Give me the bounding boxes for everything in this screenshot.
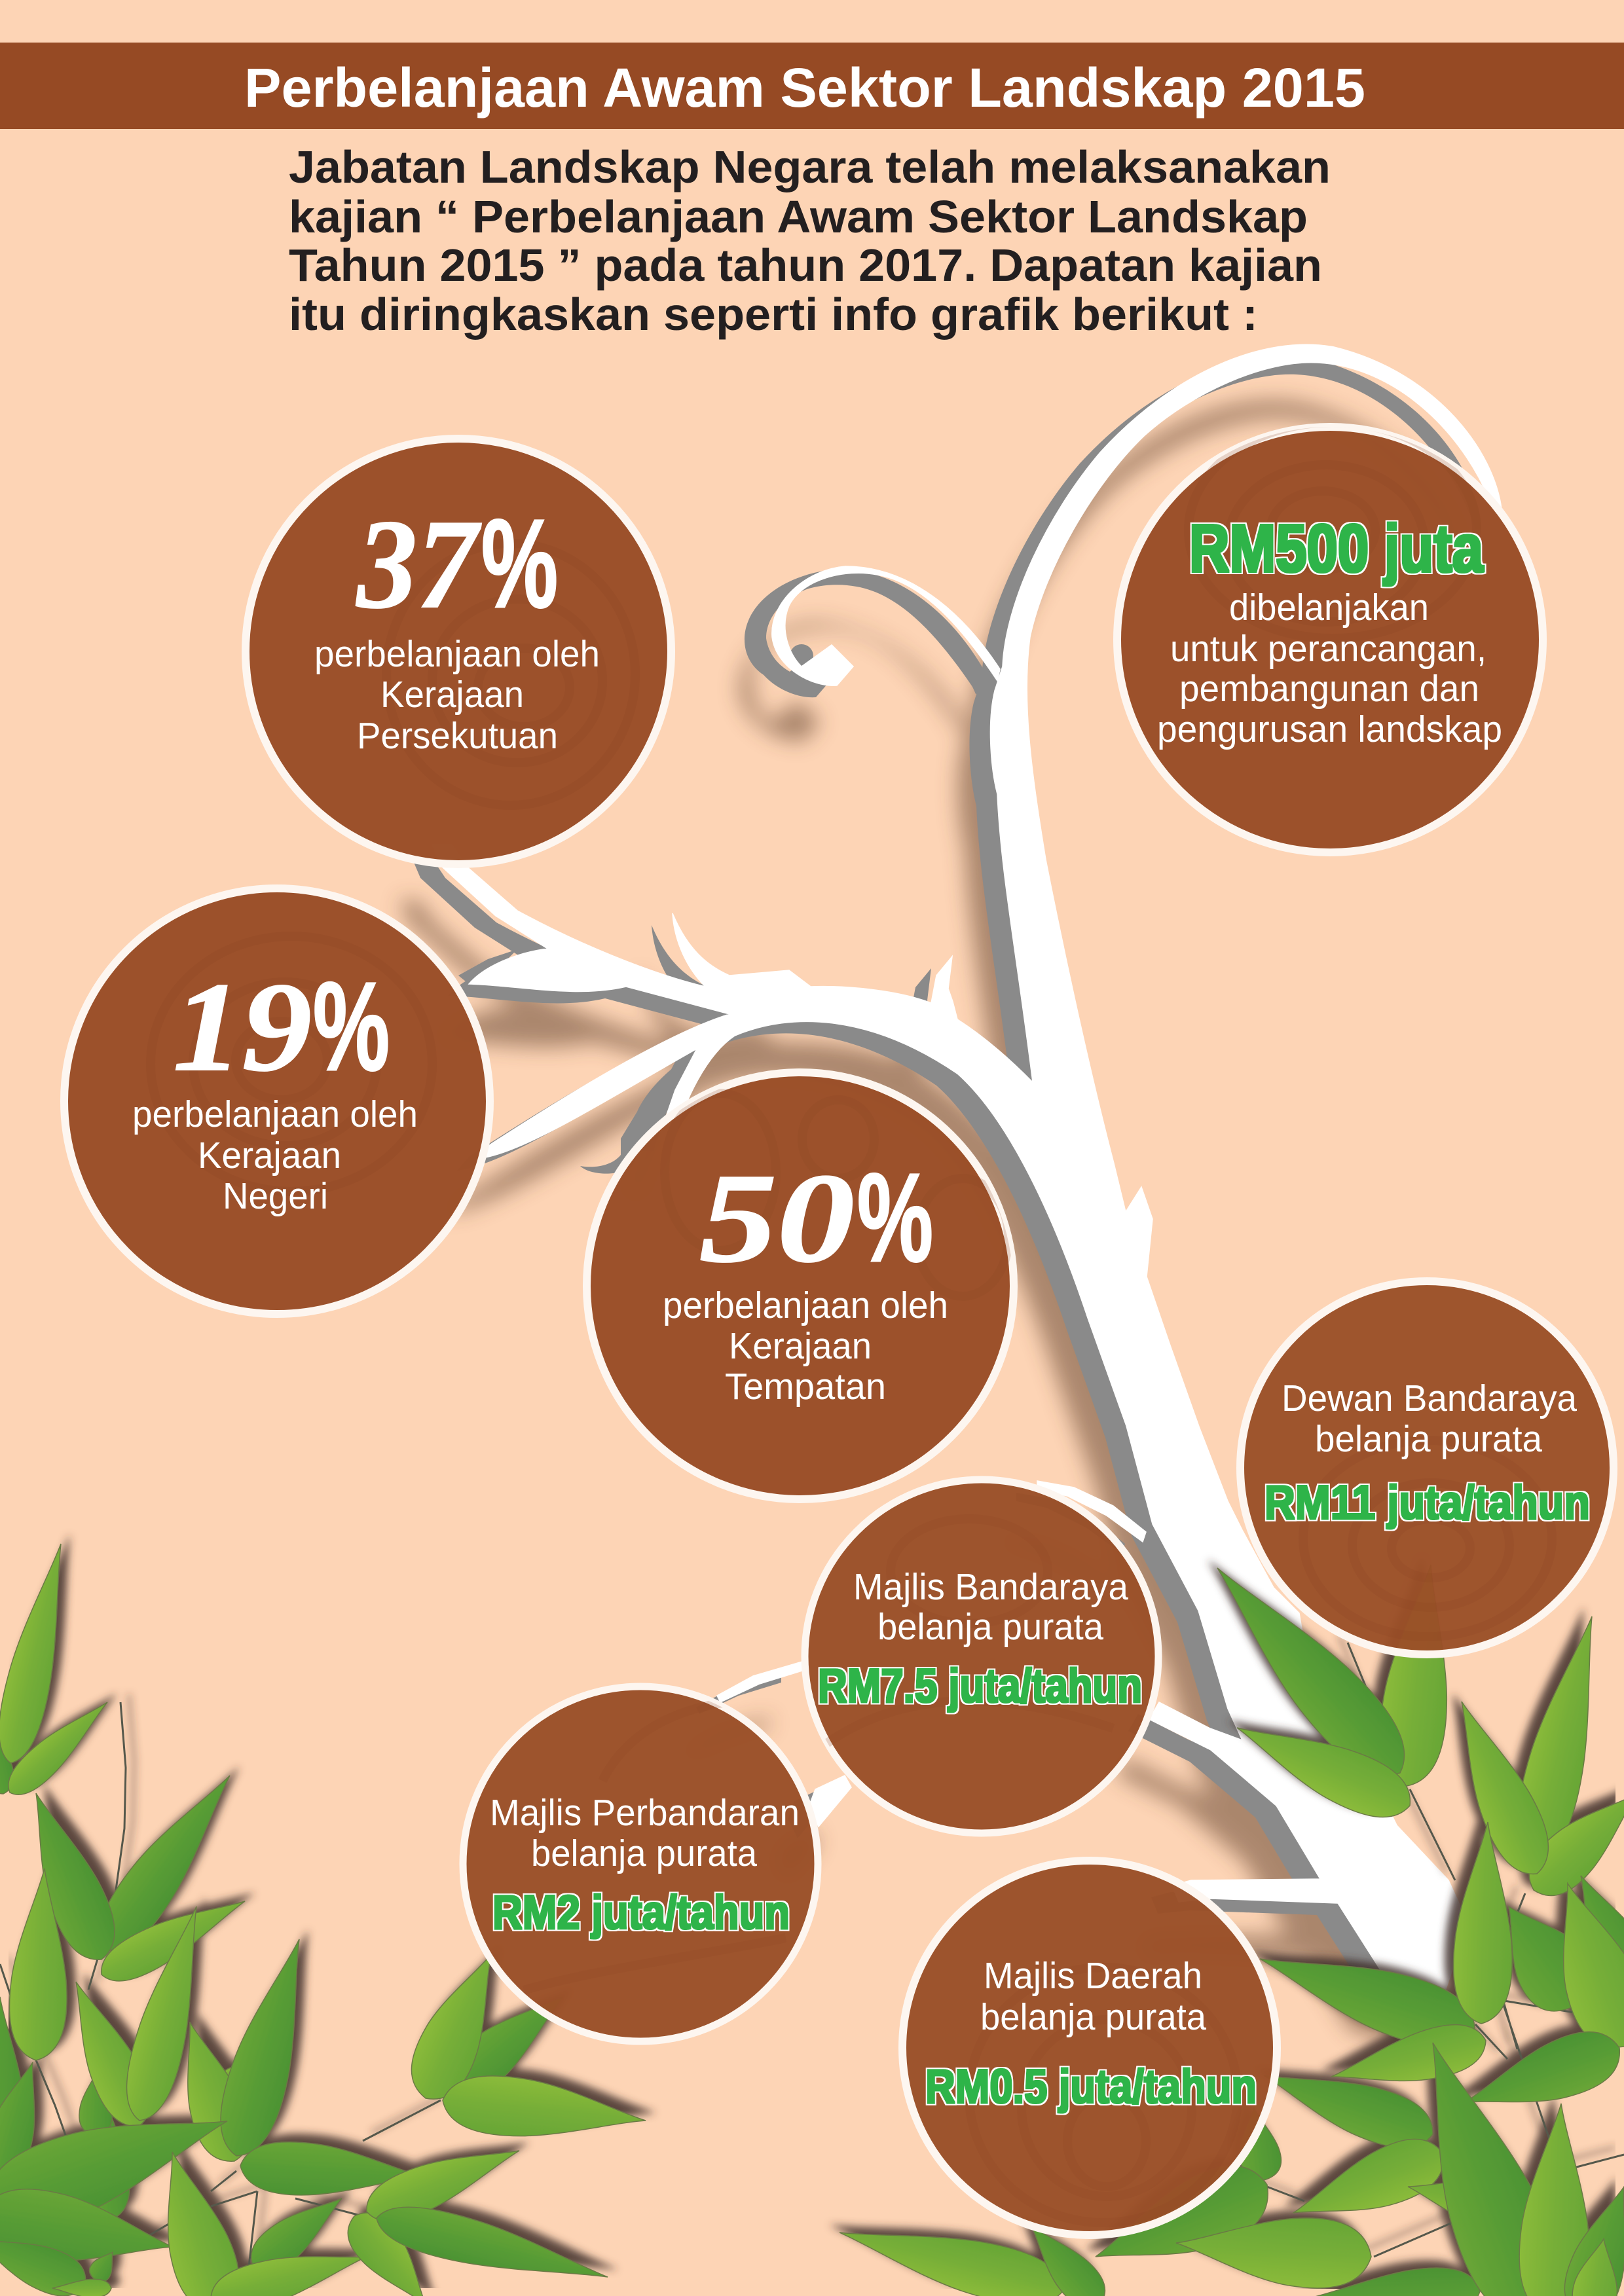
label: Majlis Daerah xyxy=(984,1955,1202,1997)
description: untuk perancangan, xyxy=(1170,628,1486,670)
percentage 37: % xyxy=(481,493,558,634)
circle: Majlis Bandaraya xyxy=(805,1480,1158,1833)
percentage 50 xyxy=(699,1147,933,1289)
title banner xyxy=(0,43,1624,129)
label federal: perbelanjaan oleh xyxy=(314,633,600,675)
circle: Dewan Bandaraya xyxy=(1240,1281,1614,1654)
label: Majlis Perbandaran xyxy=(490,1792,800,1834)
tree grey side xyxy=(411,356,1481,2003)
label federal: Persekutuan xyxy=(357,715,558,757)
label xyxy=(853,1566,1128,1648)
amount RM500 juta: RM500 juta xyxy=(1189,511,1484,586)
amount RM0.5: RM0.5 juta/tahun xyxy=(925,2060,1257,2113)
label federal xyxy=(314,633,600,757)
description: dibelanjakan xyxy=(1229,587,1429,629)
tree soft shadow xyxy=(399,400,1469,2047)
percentage 19 xyxy=(173,956,390,1098)
stems right xyxy=(1262,1643,1624,2257)
percentage 19: % xyxy=(313,956,390,1097)
percentage 50: % xyxy=(857,1147,933,1288)
label state: Kerajaan xyxy=(198,1135,341,1176)
label state: perbelanjaan oleh xyxy=(132,1093,418,1135)
label federal: Kerajaan xyxy=(380,674,524,716)
bamboo leaves left xyxy=(0,1539,649,2296)
label state xyxy=(132,1093,418,1217)
description xyxy=(1157,587,1502,750)
amount RM7.5: RM7.5 juta/tahun xyxy=(818,1660,1142,1713)
label xyxy=(980,1955,1206,2038)
percentage 19: 19 xyxy=(173,957,312,1098)
stems left xyxy=(0,1702,441,2267)
description: pembangunan dan xyxy=(1179,668,1479,710)
amount RM2: RM2 juta/tahun xyxy=(492,1886,790,1939)
label local: Tempatan xyxy=(725,1366,886,1408)
label xyxy=(1282,1377,1577,1460)
label: belanja purata xyxy=(877,1606,1103,1648)
circle: Majlis Perbandaran xyxy=(463,1686,818,2041)
bamboo leaves right xyxy=(833,1546,1624,2296)
label local xyxy=(663,1285,948,1408)
intro text block: itu diringkaskan seperti info grafik berikut : xyxy=(289,289,1258,340)
percentage 50: 50 xyxy=(699,1148,855,1289)
circle: 37 percent federal xyxy=(246,439,671,864)
intro text block: kajian “ Perbelanjaan Awam Sektor Landskap xyxy=(289,191,1308,242)
intro text block xyxy=(289,141,1331,340)
intro text block: Tahun 2015 ” pada tahun 2017. Dapatan kajian xyxy=(289,240,1322,291)
circle: 19 percent state xyxy=(64,888,490,1314)
label state: Negeri xyxy=(223,1175,328,1217)
title text: Perbelanjaan Awam Sektor Landskap 2015 xyxy=(244,57,1365,118)
circle: 50 percent local xyxy=(587,1072,1014,1499)
circle: Majlis Daerah xyxy=(902,1861,1277,2235)
label local: perbelanjaan oleh xyxy=(663,1285,948,1326)
label: belanja purata xyxy=(1315,1418,1542,1460)
amount RM11: RM11 juta/tahun xyxy=(1264,1476,1590,1529)
percentage 37: 37 xyxy=(356,494,481,635)
description: pengurusan landskap xyxy=(1157,708,1502,750)
tree white xyxy=(432,344,1502,1991)
label: Majlis Bandaraya xyxy=(853,1566,1128,1608)
percentage 37 xyxy=(356,493,558,635)
circle: RM500 million xyxy=(1117,422,1543,852)
label xyxy=(490,1792,800,1874)
intro text block: Jabatan Landskap Negara telah melaksanakan xyxy=(289,141,1331,192)
label: Dewan Bandaraya xyxy=(1282,1377,1577,1419)
label local: Kerajaan xyxy=(729,1325,872,1367)
label: belanja purata xyxy=(531,1832,757,1874)
label: belanja purata xyxy=(980,1996,1206,2038)
